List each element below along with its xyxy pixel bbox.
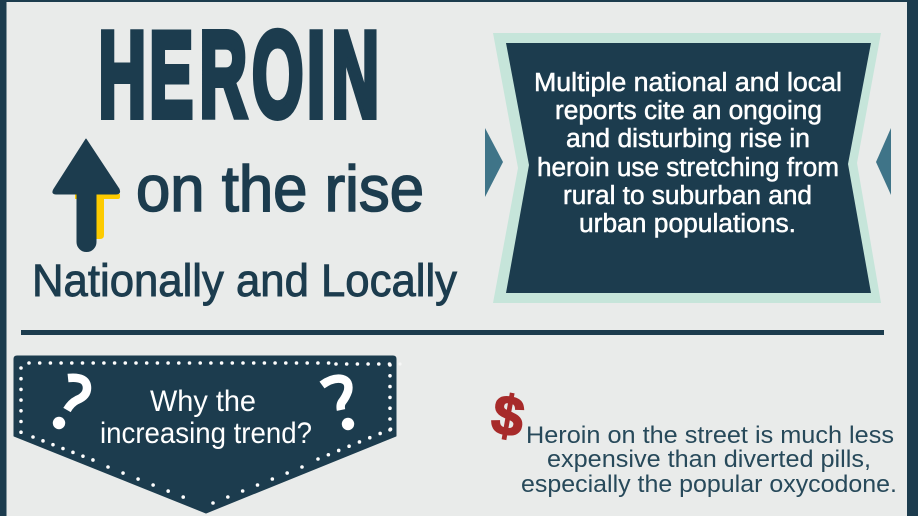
section divider: [21, 330, 884, 335]
text block: heroin price: especially the popular oxycodone.: [521, 471, 897, 498]
panel text: and disturbing rise in: [566, 125, 810, 153]
subtitle: on the rise: on the rise: [136, 152, 424, 225]
icon: up arrow with yellow shadow: [53, 139, 120, 252]
text block: heroin price: Heroin on the street is much less: [526, 422, 894, 449]
banner: why the increasing trend: increasing trend?: [100, 417, 312, 450]
banner dotted border: [21, 363, 391, 503]
text block: heroin price: expensive than diverted pills,: [547, 446, 871, 473]
arrow: left panel marker: [485, 128, 503, 197]
icon: right question mark: [322, 379, 354, 430]
text block: heroin price: [521, 422, 897, 498]
panel: rise summary: [493, 33, 881, 303]
panel text: Multiple national and local: [534, 69, 842, 97]
icon: left question mark: [53, 378, 87, 429]
panel text: urban populations.: [579, 210, 796, 238]
panel fill: [506, 43, 871, 293]
banner: why the increasing trend: [14, 356, 402, 513]
arrow: right panel marker: [876, 128, 891, 195]
icon: dollar sign: $: [487, 382, 529, 449]
banner heading: Why the: [150, 385, 256, 418]
title: HEROIN: HEROIN: [98, 6, 379, 143]
panel text: heroin use stretching from: [537, 154, 839, 182]
panel border: [493, 33, 881, 303]
panel text: reports cite an ongoing: [555, 97, 822, 125]
panel text: rural to suburban and: [563, 182, 812, 210]
banner shape: [14, 356, 396, 513]
panel text: [534, 69, 842, 238]
subtitle: Nationally and Locally: Nationally and Locally: [32, 255, 457, 306]
